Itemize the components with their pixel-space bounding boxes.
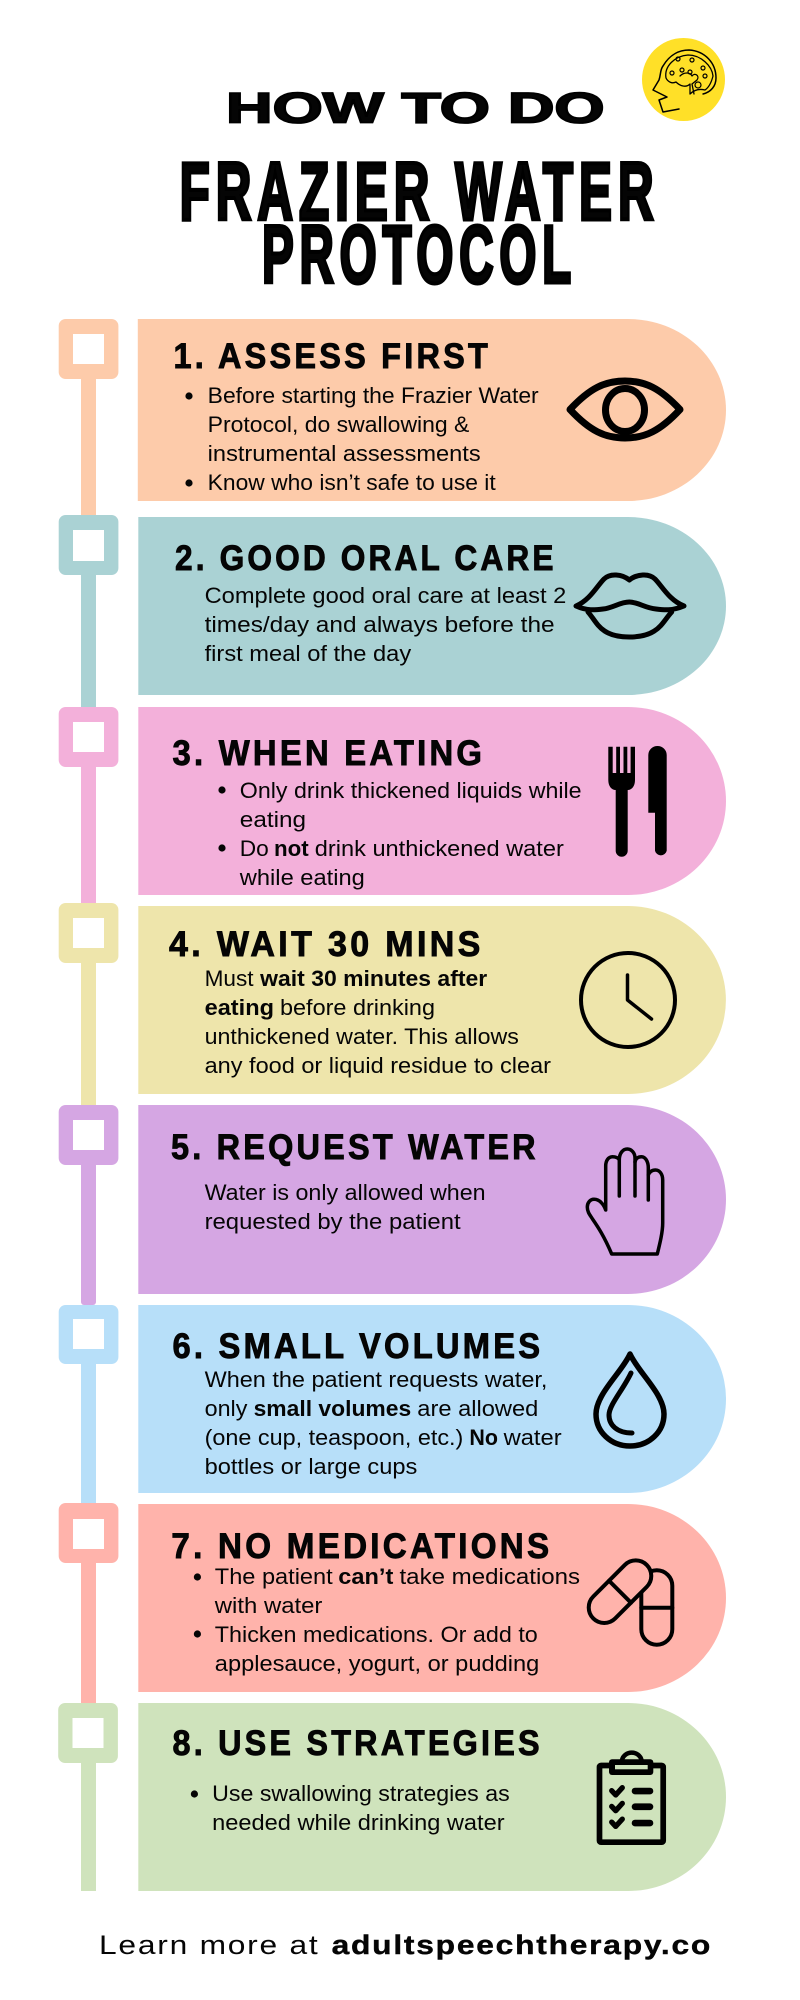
body text 3: while eating <box>239 865 365 890</box>
card 4 <box>138 906 726 1094</box>
body text 2: Complete good oral care at least 2 <box>205 583 566 608</box>
body text 8: Use swallowing strategies as <box>212 1781 510 1806</box>
body text 1 <box>185 383 539 495</box>
heading 5: 5. REQUEST WATER <box>171 1127 539 1167</box>
heading 6: 6. SMALL VOLUMES <box>172 1326 543 1366</box>
footer: learn more: Learn more at <box>99 1930 320 1960</box>
body text 7: take medications <box>400 1564 580 1589</box>
body text 5 <box>205 1180 486 1234</box>
icon: fork and knife <box>608 746 667 857</box>
body text 7: The patient <box>215 1564 333 1589</box>
timeline marker 5 <box>59 1105 118 1165</box>
body text 2: first meal of the day <box>205 641 411 666</box>
heading 8: 8. USE STRATEGIES <box>172 1723 543 1763</box>
body text 3: Only drink thickened liquids while <box>240 778 582 803</box>
icon: eye <box>570 381 680 438</box>
timeline marker 4 <box>59 903 118 963</box>
body text 7: can’t <box>338 1564 394 1589</box>
body text 6: No <box>469 1425 498 1450</box>
timeline connector 6 <box>81 1360 96 1506</box>
body text 6: are allowed <box>417 1396 538 1421</box>
timeline connector 5 <box>81 1161 96 1305</box>
body text 7: applesauce, yogurt, or pudding <box>215 1651 539 1676</box>
icon: lips <box>576 575 684 637</box>
timeline connector 1 <box>81 375 96 517</box>
heading 3: 3. WHEN EATING <box>172 733 485 773</box>
body text 6: only <box>205 1396 247 1421</box>
body text 4: wait 30 minutes after <box>259 966 488 991</box>
heading 1: 1. ASSESS FIRST <box>174 336 491 376</box>
step 8: use strategies <box>58 1703 726 1891</box>
body text 7: Thicken medications. Or add to <box>215 1622 538 1647</box>
body text 6 <box>205 1367 562 1479</box>
step 5: request water <box>59 1105 726 1305</box>
body text 4: unthickened water. This allows <box>205 1024 519 1049</box>
body text 3: eating <box>240 807 306 832</box>
body text 5: Water is only allowed when <box>205 1180 486 1205</box>
title: protocol: PROTOCOL <box>262 210 577 300</box>
timeline marker 6 <box>59 1305 118 1364</box>
card 6 <box>138 1305 726 1493</box>
timeline connector 4 <box>81 959 96 1107</box>
timeline marker 8 <box>58 1703 118 1763</box>
icon: clipboard checklist <box>600 1753 663 1842</box>
header <box>180 38 725 300</box>
footer: learn more <box>99 1930 712 1960</box>
timeline marker 1 <box>59 319 118 379</box>
step 3: when eating <box>59 707 726 905</box>
icon: pills <box>582 1554 672 1645</box>
step 6: small volumes <box>59 1305 726 1506</box>
icon: yellow circle with head and brain <box>642 38 725 121</box>
body text 6: bottles or large cups <box>205 1454 417 1479</box>
card 2 <box>138 517 726 695</box>
body text 3: not <box>274 836 309 861</box>
body text 3: Do <box>240 836 269 861</box>
step 7: no medications <box>59 1503 726 1705</box>
body text 2: times/day and always before the <box>205 612 555 637</box>
timeline connector 7 <box>81 1559 96 1705</box>
heading 4: 4. WAIT 30 MINS <box>169 924 484 964</box>
icon: water drop <box>596 1354 664 1446</box>
icon: clock <box>581 953 675 1047</box>
card 7 <box>138 1504 726 1692</box>
body text 8 <box>191 1781 510 1835</box>
body text 6: water <box>503 1425 562 1450</box>
body text 6: When the patient requests water, <box>205 1367 547 1392</box>
body text 7: with water <box>214 1593 322 1618</box>
heading 7: 7. NO MEDICATIONS <box>171 1526 552 1566</box>
body text 8: needed while drinking water <box>212 1810 505 1835</box>
body text 1: Protocol, do swallowing & <box>208 412 470 437</box>
heading 2: 2. GOOD ORAL CARE <box>175 538 557 578</box>
timeline marker 3 <box>59 707 118 767</box>
body text 4: Must <box>205 966 254 991</box>
body text 4: eating <box>205 995 274 1020</box>
card 5 <box>138 1105 726 1294</box>
timeline marker 2 <box>59 515 118 575</box>
timeline connector 2 <box>81 571 96 709</box>
card 3 <box>138 707 726 895</box>
body text 4: any food or liquid residue to clear <box>205 1053 551 1078</box>
body text 5: requested by the patient <box>205 1209 461 1234</box>
footer: learn more: adultspeechtherapy.co <box>332 1930 712 1960</box>
step 2: good oral care <box>59 515 726 709</box>
step 1: assess first <box>59 319 726 517</box>
body text 6: (one cup, teaspoon, etc.) <box>205 1425 463 1450</box>
body text 6: small volumes <box>254 1396 411 1421</box>
body text 2 <box>205 583 566 666</box>
body text 3 <box>218 778 582 890</box>
body text 1: instrumental assessments <box>208 441 481 466</box>
card 8 <box>138 1703 726 1891</box>
card 1 <box>138 319 726 501</box>
body text 7 <box>194 1564 580 1676</box>
body text 4 <box>205 966 551 1078</box>
heading: how to do: HOW TO DO <box>226 84 605 132</box>
body text 4: before drinking <box>280 995 435 1020</box>
body text 1: Before starting the Frazier Water <box>208 383 539 408</box>
timeline connector 8 <box>81 1759 96 1891</box>
body text 1: Know who isn’t safe to use it <box>208 470 496 495</box>
body text 3: drink unthickened water <box>315 836 564 861</box>
timeline marker 7 <box>59 1503 118 1563</box>
step 4: wait 30 mins <box>59 903 726 1107</box>
timeline connector 3 <box>81 763 96 905</box>
icon: raised hand <box>587 1149 663 1254</box>
